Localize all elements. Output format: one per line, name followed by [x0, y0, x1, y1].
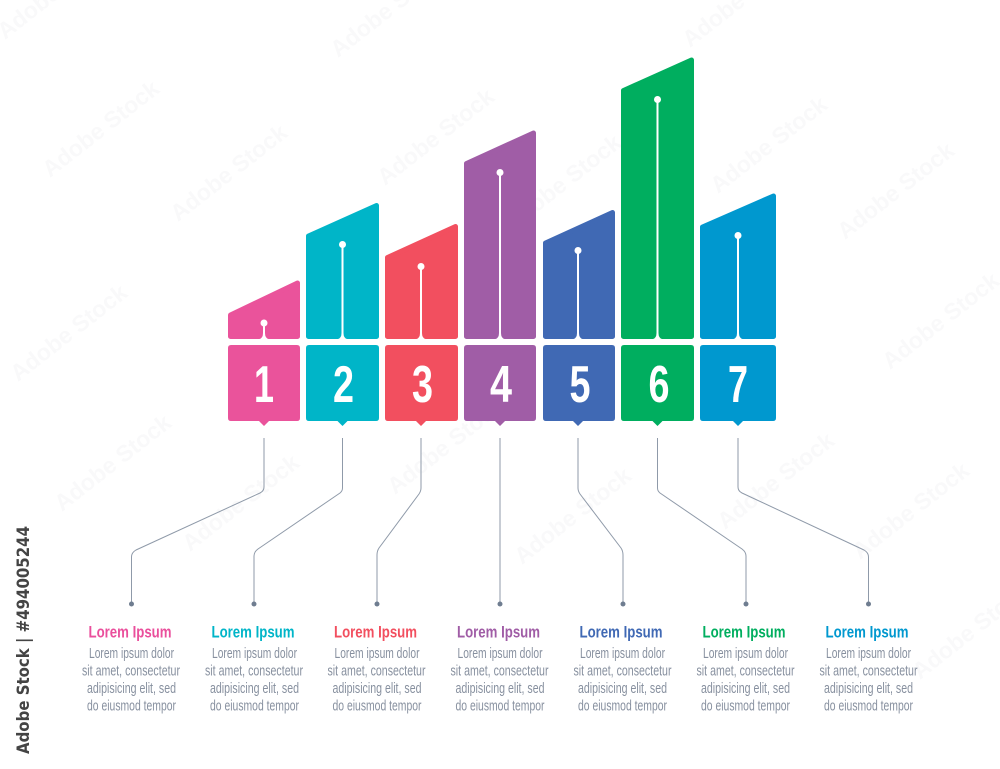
text block 5: sit amet, consectetur — [574, 664, 672, 680]
connector 5 — [578, 438, 626, 606]
text block 4: Lorem Ipsum — [457, 622, 540, 642]
bar 1: pink — [230, 283, 298, 339]
text block 5: do eiusmod tempor — [578, 698, 667, 714]
text block 1 — [82, 622, 180, 714]
text block 6: sit amet, consectetur — [696, 664, 795, 680]
text block 3: sit amet, consectetur — [328, 664, 426, 680]
watermark pattern: Adobe Stock — [499, 129, 626, 236]
watermark pattern: Adobe Stock — [847, 457, 974, 564]
text block 2: adipisicing elit, sed — [210, 681, 299, 697]
text block 1: do eiusmod tempor — [87, 698, 176, 714]
bar 7: sky blue — [702, 196, 774, 339]
text block 1: Lorem ipsum dolor — [89, 646, 174, 662]
number card 4: 4 — [490, 356, 512, 414]
bar 4: purple — [466, 133, 534, 339]
text block 6 — [696, 622, 795, 714]
text block 4: Lorem ipsum dolor — [458, 646, 543, 662]
watermark pattern: Adobe Stock — [832, 137, 959, 244]
watermark pattern: Adobe Stock — [705, 91, 832, 198]
bar 2: teal — [308, 206, 376, 339]
bar 6: green — [624, 60, 692, 339]
text block 3: adipisicing elit, sed — [332, 681, 422, 697]
text block 7: Lorem ipsum dolor — [826, 646, 911, 662]
number card 7 — [700, 345, 776, 426]
text block 7: Lorem Ipsum — [826, 622, 908, 642]
number card 3 — [385, 345, 458, 426]
number card 6 — [621, 345, 694, 426]
text block 6: Lorem Ipsum — [702, 622, 786, 642]
text block 3: Lorem Ipsum — [334, 622, 417, 642]
watermark pattern: Adobe Stock — [49, 409, 176, 516]
text block 3: Lorem ipsum dolor — [334, 646, 420, 662]
watermark pattern: Adobe Stock — [712, 427, 839, 534]
watermark pattern: Adobe Stock — [372, 83, 499, 190]
stock id label: Adobe Stock | #494005244 — [14, 526, 34, 754]
text block 6: adipisicing elit, sed — [701, 681, 790, 697]
number card 1 — [228, 345, 300, 426]
text block 4: do eiusmod tempor — [456, 698, 545, 714]
connector 4 — [498, 438, 502, 606]
text block 1: Lorem Ipsum — [88, 622, 172, 642]
number card 5 — [543, 345, 615, 426]
text block 6: Lorem ipsum dolor — [703, 646, 788, 662]
number card 2 — [306, 345, 379, 426]
connector 2 — [252, 438, 342, 606]
text block 1: sit amet, consectetur — [82, 664, 180, 680]
text block 2: Lorem Ipsum — [212, 622, 294, 642]
watermark pattern: Adobe Stock — [382, 392, 509, 499]
text block 7 — [820, 622, 918, 714]
number card 7: 7 — [728, 356, 748, 414]
text block 4 — [450, 622, 549, 714]
bar 3: red — [388, 226, 456, 339]
connector 6 — [658, 438, 748, 606]
watermark pattern: Adobe Stock — [5, 279, 132, 386]
text block 1: adipisicing elit, sed — [87, 681, 176, 697]
text block 4: adipisicing elit, sed — [456, 681, 544, 697]
connector 3 — [374, 438, 421, 606]
number card 5: 5 — [570, 356, 590, 414]
watermark pattern: Adobe Stock — [37, 75, 164, 182]
text block 3: do eiusmod tempor — [332, 698, 422, 714]
text block 3 — [328, 622, 426, 714]
text block 2 — [205, 622, 303, 714]
text block 7: do eiusmod tempor — [824, 698, 913, 714]
text block 6: do eiusmod tempor — [701, 698, 790, 714]
watermark pattern: Adobe Stock — [177, 449, 304, 556]
text block 2: Lorem ipsum dolor — [212, 646, 297, 662]
text block 5: Lorem ipsum dolor — [580, 646, 665, 662]
text block 7: sit amet, consectetur — [820, 664, 918, 680]
number card 2: 2 — [333, 356, 354, 414]
text block 5: Lorem Ipsum — [580, 622, 662, 642]
connector 7 — [738, 438, 871, 606]
text block 4: sit amet, consectetur — [450, 664, 549, 680]
watermark pattern: Adobe Stock — [165, 119, 292, 226]
watermark pattern: Adobe Stock — [509, 462, 636, 569]
number card 6: 6 — [648, 356, 670, 414]
connector 1 — [129, 438, 264, 606]
number card 4 — [464, 345, 536, 426]
number card 1: 1 — [254, 356, 274, 414]
text block 5 — [574, 622, 672, 714]
bar 5: blue — [546, 212, 612, 339]
text block 2: do eiusmod tempor — [210, 698, 299, 714]
text block 2: sit amet, consectetur — [205, 664, 303, 680]
number card 3: 3 — [412, 356, 433, 414]
text block 7: adipisicing elit, sed — [824, 681, 913, 697]
text block 5: adipisicing elit, sed — [578, 681, 667, 697]
